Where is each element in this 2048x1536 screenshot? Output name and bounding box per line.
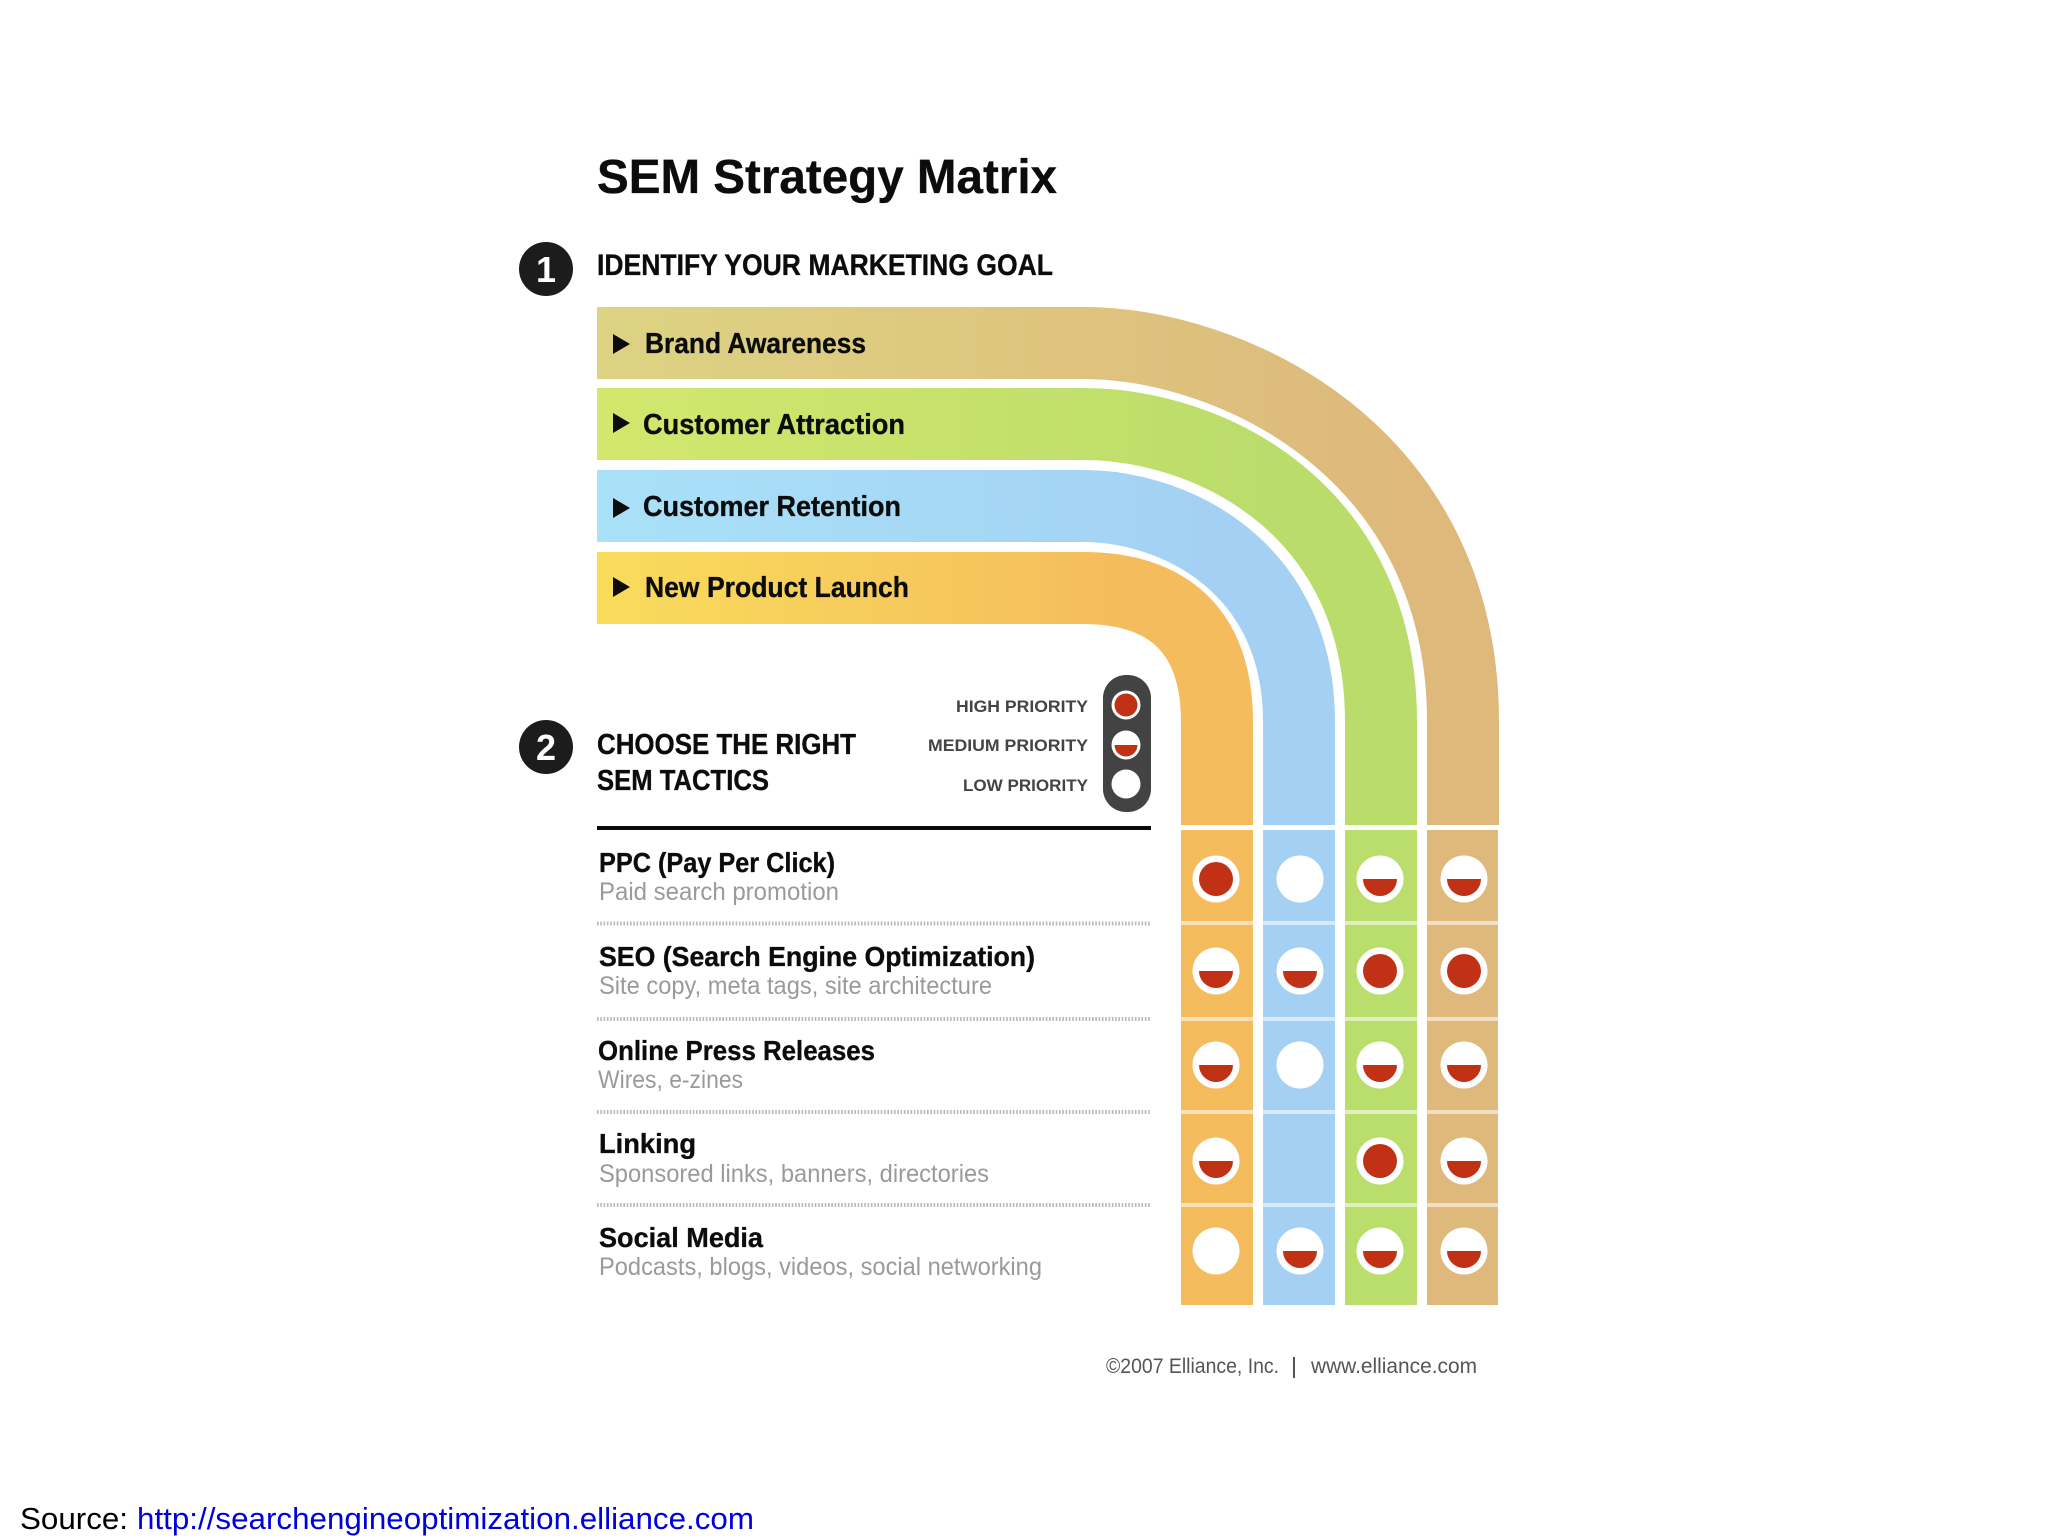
column: customer attraction — [1345, 830, 1417, 1305]
tactic: linking: Linking — [599, 1128, 696, 1159]
matrix row separators — [1181, 921, 1498, 1207]
source line: http://searchengineoptimization.elliance.com — [137, 1501, 754, 1536]
heading: choose the right sem tactics: CHOOSE THE RIGHT — [597, 729, 857, 761]
markers row: social media — [1192, 1228, 1488, 1274]
row dividers — [597, 924, 1151, 1205]
label: brand awareness: Brand Awareness — [645, 328, 866, 360]
heading: choose the right sem tactics: SEM TACTICS — [597, 765, 769, 797]
band: brand awareness — [597, 343, 1463, 825]
copyright footer: ©2007 Elliance, Inc. — [1106, 1355, 1279, 1378]
legend labels: HIGH PRIORITY — [956, 698, 1088, 716]
goal labels — [613, 328, 909, 604]
markers row: seo — [1192, 948, 1488, 994]
band: customer retention — [597, 506, 1299, 825]
label: customer attraction: Customer Attraction — [643, 409, 905, 441]
matrix columns — [1181, 830, 1498, 1305]
tactic: seo: SEO (Search Engine Optimization) — [599, 941, 1035, 972]
heading: choose the right sem tactics — [597, 729, 857, 797]
tactic: online press releases: Wires, e-zines — [598, 1066, 743, 1094]
markers row: linking — [1192, 1138, 1488, 1184]
legend labels — [928, 698, 1088, 795]
tactic: online press releases: Online Press Releases — [598, 1035, 875, 1066]
priority legend — [928, 675, 1151, 812]
icon: number 2 badge — [519, 720, 573, 774]
priority markers — [1192, 856, 1488, 1274]
legend labels: LOW PRIORITY — [963, 777, 1088, 795]
step 1 heading — [519, 242, 1053, 296]
icon: number 2 badge: 2 — [536, 727, 556, 768]
source line: Source: — [20, 1501, 128, 1536]
tactic: social media — [599, 1222, 1042, 1281]
band: customer attraction — [597, 424, 1381, 825]
legend traffic light — [1103, 675, 1151, 812]
tactic: ppc: PPC (Pay Per Click) — [599, 847, 835, 878]
tactic: social media: Social Media — [599, 1222, 763, 1253]
copyright footer: www.elliance.com — [1310, 1355, 1477, 1378]
label: customer retention: Customer Retention — [643, 491, 901, 523]
tactic: online press releases — [598, 1035, 875, 1094]
column: new product launch — [1181, 830, 1253, 1305]
label: new product launch: New Product Launch — [645, 572, 909, 604]
markers row: online press releases — [1192, 1042, 1488, 1088]
legend labels: MEDIUM PRIORITY — [928, 737, 1088, 755]
heading rule — [597, 826, 1151, 830]
tactic: seo — [599, 941, 1035, 1000]
heading: identify your marketing goal: IDENTIFY YOUR MARKETING GOAL — [597, 249, 1053, 282]
icon: number 1 badge — [519, 242, 573, 296]
column: customer retention — [1263, 830, 1335, 1305]
tactic: linking: Sponsored links, banners, directories — [599, 1160, 989, 1188]
band: new product launch — [597, 588, 1217, 825]
tactic: linking — [599, 1128, 989, 1188]
column: brand awareness — [1427, 830, 1498, 1305]
copyright footer — [1106, 1355, 1477, 1378]
title: SEM Strategy Matrix — [597, 151, 1057, 204]
step 2 heading — [519, 720, 857, 797]
tactic: seo: Site copy, meta tags, site architecture — [599, 972, 992, 1000]
tactic: ppc: Paid search promotion — [599, 878, 839, 906]
icon: number 1 badge: 1 — [536, 249, 556, 290]
tactic: social media: Podcasts, blogs, videos, social networking — [599, 1253, 1042, 1281]
tactics list — [598, 847, 1042, 1281]
tactic: ppc — [599, 847, 839, 906]
markers row: ppc — [1192, 856, 1488, 902]
curved goal bands — [597, 343, 1463, 825]
